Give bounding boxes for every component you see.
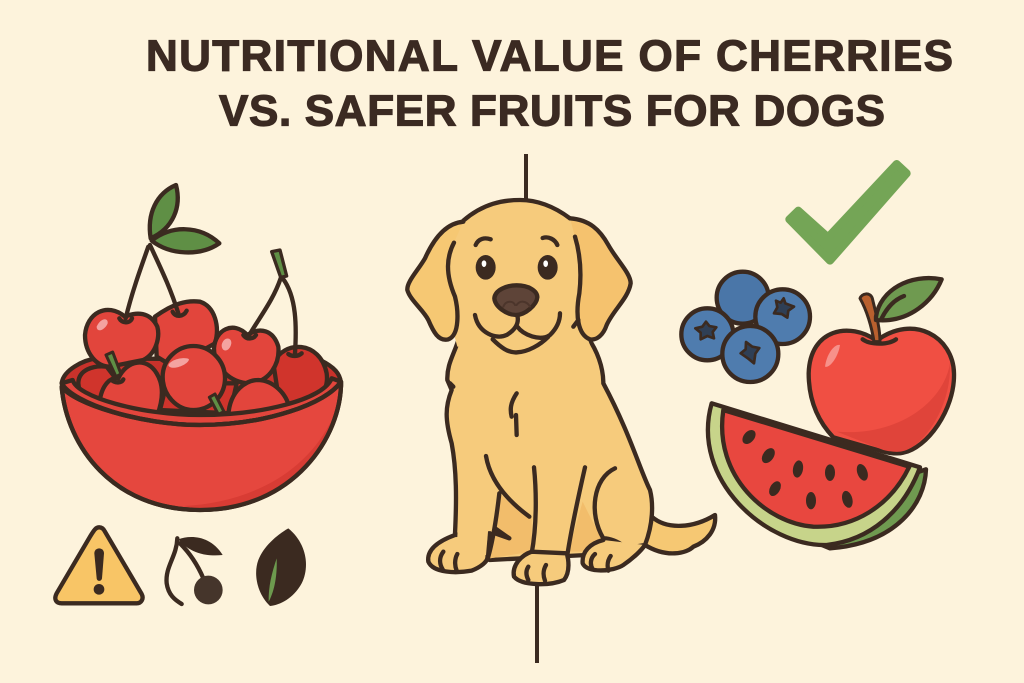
left ear [407,222,463,340]
face [476,237,557,245]
divider line top [524,154,528,202]
title: VS. SAFER FRUITS FOR DOGS [219,86,885,136]
illustration: puppy [407,200,715,584]
paws [428,533,490,572]
bowl body [62,382,341,510]
head top outline [463,200,570,221]
icon: warning triangle [55,527,143,603]
shaded belly [490,493,532,558]
title: NUTRITIONAL VALUE OF CHERRIES [146,32,953,80]
panel: cherries side [55,185,350,606]
watermelon slice [708,403,926,548]
body [447,337,652,560]
blueberries [681,272,810,382]
tail [645,515,715,553]
head fill [440,200,597,347]
legs and chest lines [486,393,623,560]
icon: green check mark [789,164,907,261]
right ear [570,218,631,340]
icon: cherry silhouette [167,537,223,604]
icon: cherry pit leaf [256,528,306,606]
panel: safer fruits [681,164,954,548]
icon: bowl of cherries [62,185,350,523]
bowl rim band [62,378,341,425]
divider line bottom [535,582,539,663]
title [146,32,953,136]
apple [809,278,954,453]
